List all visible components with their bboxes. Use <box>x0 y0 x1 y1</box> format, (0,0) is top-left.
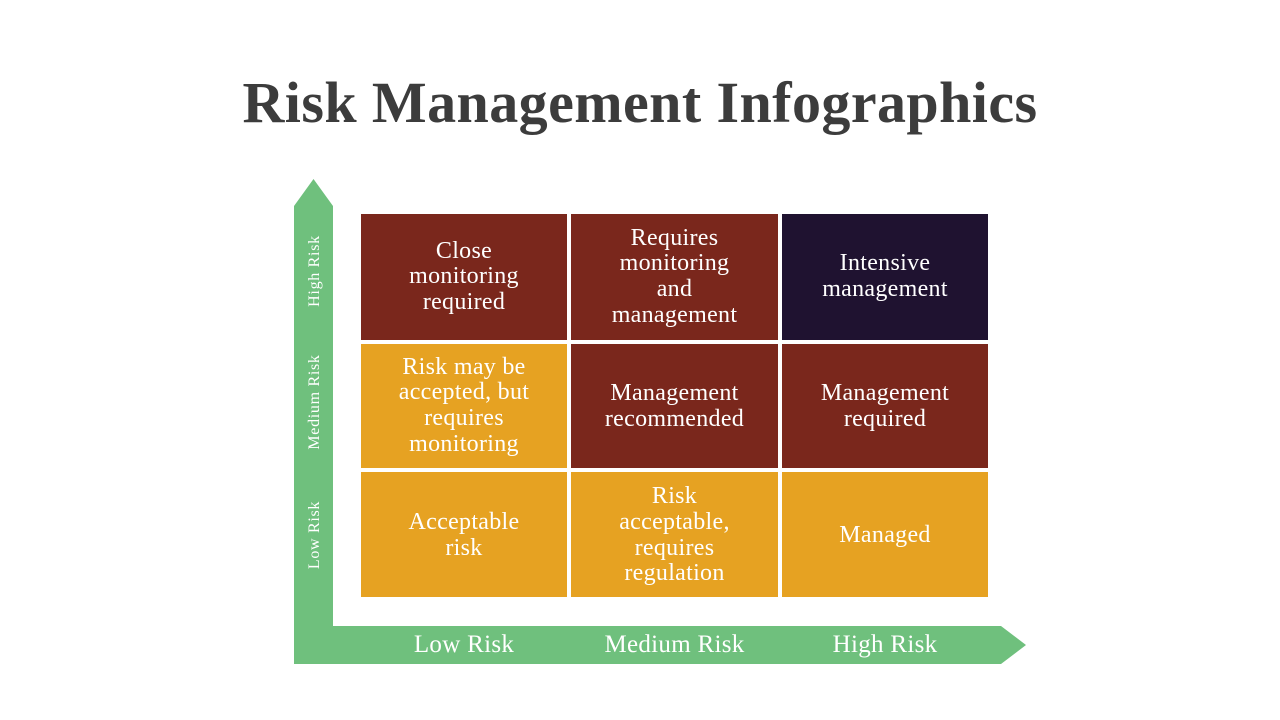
cell: close monitoring required: Close <box>436 238 492 264</box>
cell: requires monitoring and management: monitoring <box>620 250 729 276</box>
cell: intensive management: management <box>822 276 948 302</box>
y axis label: low risk: Low Risk <box>306 501 323 569</box>
cell: risk acceptable requires regulation <box>571 472 778 597</box>
cell: risk acceptable requires regulation: regulation <box>624 560 725 586</box>
x axis label: low risk: Low Risk <box>414 631 514 658</box>
cell: management required: Management <box>821 380 949 406</box>
y axis label: medium risk: Medium Risk <box>306 354 323 450</box>
cell: management required <box>782 344 988 468</box>
cell: risk acceptable requires regulation: requires <box>635 534 714 560</box>
cell: management recommended <box>571 344 778 468</box>
cell: risk may be accepted: requires <box>424 405 504 431</box>
cell: managed: Managed <box>839 522 931 548</box>
cell: intensive management <box>782 214 988 340</box>
title: Risk Management Infographics <box>242 70 1038 135</box>
cell: management recommended: recommended <box>605 406 744 432</box>
y axis label: high risk: High Risk <box>306 235 323 307</box>
cell: managed <box>782 472 988 597</box>
cell: risk may be accepted: monitoring <box>409 431 519 457</box>
cell: close monitoring required: monitoring <box>409 263 519 289</box>
x axis label: medium risk: Medium Risk <box>604 631 745 658</box>
cell: risk acceptable requires regulation: Risk <box>652 483 697 509</box>
cell: risk may be accepted: accepted, but <box>399 379 529 405</box>
cell: risk may be accepted <box>361 344 567 468</box>
cell: requires monitoring and management: management <box>612 302 737 328</box>
cell: requires monitoring and management: and <box>657 276 692 302</box>
cell: acceptable risk: Acceptable <box>409 509 519 535</box>
cell: acceptable risk <box>361 472 567 597</box>
cell: management required: required <box>844 406 926 432</box>
cell: close monitoring required <box>361 214 567 340</box>
cell: intensive management: Intensive <box>840 250 930 276</box>
cell: requires monitoring and management: Requires <box>631 225 718 251</box>
cell: management recommended: Management <box>610 380 739 406</box>
cell: close monitoring required: required <box>423 289 505 315</box>
cell: risk may be accepted: Risk may be <box>402 354 526 380</box>
cell: requires monitoring and management <box>571 214 778 340</box>
x axis label: high risk: High Risk <box>833 631 937 658</box>
cell: acceptable risk: risk <box>445 534 483 560</box>
cell: risk acceptable requires regulation: acceptable, <box>619 509 730 535</box>
